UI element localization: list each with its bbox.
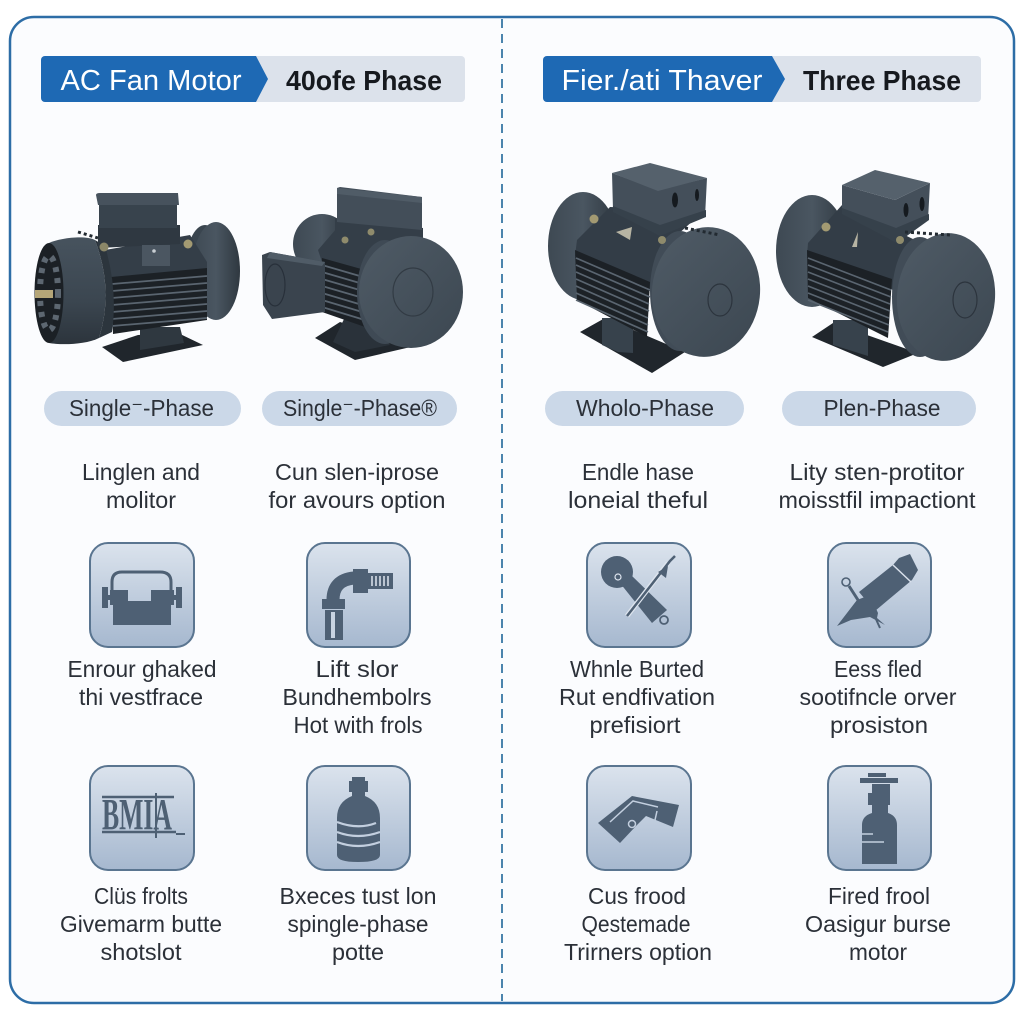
description 4: Lity sten-protitor	[790, 459, 965, 485]
pill label 1: Single⁻-Phase	[69, 395, 214, 421]
description 3: Endle hase	[582, 459, 694, 485]
icon: grease gun	[828, 543, 931, 647]
icon: terminal housing	[90, 543, 194, 647]
right header banner: Three Phase	[803, 65, 961, 96]
description 2: Cun slen-iprose	[275, 459, 439, 485]
motor 3	[548, 163, 766, 373]
description 1	[82, 459, 200, 513]
feature text 6: spingle-phase	[288, 911, 428, 937]
feature text 1: thi vestfrace	[79, 684, 203, 710]
feature text 4: prosiston	[830, 712, 928, 738]
icon: oil bottle	[828, 766, 931, 870]
icon: nameplate mark: BMIA	[102, 790, 172, 839]
motor 1	[34, 193, 240, 362]
feature text 8: motor	[849, 939, 907, 965]
pill label 4: Plen-Phase	[824, 395, 940, 421]
feature text 7	[564, 883, 712, 965]
left header banner: AC Fan Motor	[60, 65, 242, 97]
feature text 4: sootifncle orver	[800, 684, 957, 710]
feature text 8: Oasigur burse	[805, 911, 951, 937]
right header banner: Fier./ati Thaver	[562, 65, 763, 97]
feature text 3: Rut endfivation	[559, 684, 715, 710]
description 1: Linglen and	[82, 459, 200, 485]
pill label 4	[782, 391, 976, 426]
icon: nameplate mark	[90, 766, 194, 870]
description 4: moisstfil impactiont	[778, 487, 976, 513]
feature text 5: Clüs frolts	[94, 883, 188, 909]
feature text 8	[805, 883, 951, 965]
feature text 2: Bundhembolrs	[282, 684, 432, 710]
description 2: for avours option	[268, 487, 446, 513]
pill label 2	[262, 391, 457, 426]
feature text 5	[60, 883, 222, 965]
feature text 7: Trirners option	[564, 939, 712, 965]
feature text 4	[800, 656, 957, 738]
motor 2	[262, 187, 463, 360]
description 2	[268, 459, 446, 513]
icon: ribbed bottle	[307, 766, 410, 870]
feature text 2	[282, 656, 432, 738]
pill label 3	[545, 391, 744, 426]
feature text 4: Eess fled	[834, 656, 922, 682]
icon: pipe elbow	[307, 543, 410, 647]
description 3: loneial theful	[568, 487, 708, 513]
feature text 6	[280, 883, 436, 965]
feature text 6: Bxeces tust lon	[280, 883, 436, 909]
motor 4	[776, 170, 1000, 367]
feature text 3	[559, 656, 715, 738]
feature text 3: Whnle Burted	[570, 656, 704, 682]
feature text 7: Qestemade	[582, 911, 690, 937]
description 1: molitor	[106, 487, 176, 513]
feature text 7: Cus frood	[588, 883, 686, 909]
pill label 2: Single⁻-Phase®	[283, 395, 437, 421]
feature text 8: Fired frool	[828, 883, 930, 909]
feature text 1	[68, 656, 216, 710]
left header banner: 40ofe Phase	[286, 65, 442, 96]
feature text 2: Hot with frols	[294, 712, 422, 738]
description 4	[778, 459, 976, 513]
description 3	[568, 459, 708, 513]
pill label 3: Wholo-Phase	[576, 395, 714, 421]
feature text 2: Lift slor	[316, 656, 399, 682]
right header banner	[543, 56, 981, 102]
feature text 1: Enrour ghaked	[68, 656, 216, 682]
feature text 5: Givemarm butte	[60, 911, 222, 937]
icon: hand tool	[587, 766, 691, 870]
feature text 5: shotslot	[100, 939, 182, 965]
feature text 6: potte	[332, 939, 384, 965]
left header banner	[41, 56, 465, 102]
center dashed divider	[501, 19, 503, 1001]
icon: crossed tools	[587, 543, 691, 647]
feature text 3: prefisiort	[590, 712, 681, 738]
pill label 1	[44, 391, 241, 426]
